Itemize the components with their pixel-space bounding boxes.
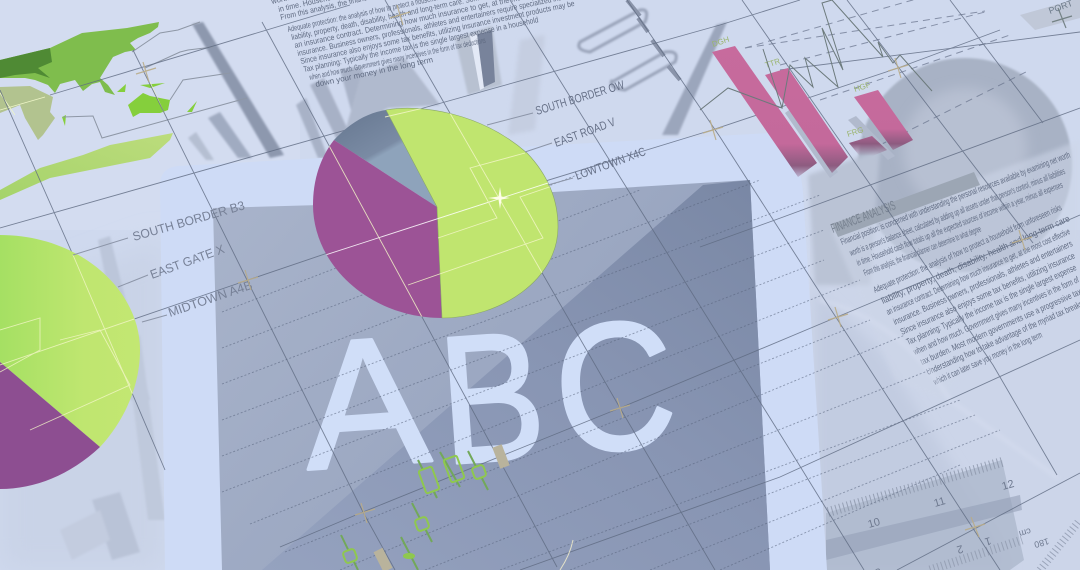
letters ABC: B	[433, 292, 551, 503]
finance text block, right: FINANCE ANALYSIS	[829, 197, 898, 236]
location labels, left: EAST GATE X	[148, 242, 227, 282]
world map	[0, 22, 247, 200]
location labels, left: SOUTH BORDER B3	[131, 198, 246, 244]
ruler and protractor	[820, 300, 1080, 570]
pink bar chart: HGF	[853, 80, 872, 94]
letters ABC: C	[546, 280, 683, 493]
ruler and protractor: 11	[933, 495, 947, 510]
finance text block, top centre	[270, 0, 589, 89]
pie chart, left	[0, 235, 140, 489]
location labels, centre: LOWTOWN X4C	[573, 144, 648, 183]
ruler and protractor: 2	[955, 542, 964, 555]
tablet frame	[160, 133, 827, 570]
location labels, centre: SOUTH BORDER OW	[534, 77, 626, 118]
finance text block, top centre: down your money in the long term	[315, 55, 434, 89]
finance text block, right	[829, 150, 1080, 387]
globe	[808, 0, 1080, 400]
pink bar chart	[700, 0, 932, 178]
pink bar chart: DGH	[711, 35, 731, 49]
ruler and protractor: 1	[983, 534, 992, 547]
dashed and dotted projection lines	[222, 170, 1000, 570]
location labels, centre: EAST ROAD V	[552, 115, 617, 150]
ruler and protractor: 180	[1033, 536, 1050, 550]
candlestick chart	[341, 446, 573, 570]
ruler and protractor: 10	[867, 516, 882, 531]
pencils and pens	[60, 22, 727, 560]
sparkle on pie	[488, 187, 510, 209]
finance text block, top centre: when and how much. Government gives many incentives in the form of tax deductions	[308, 36, 486, 82]
pie chart, top	[313, 108, 558, 318]
letters ABC	[296, 280, 683, 508]
location labels, left	[73, 198, 254, 322]
pink bar chart: FRG	[846, 125, 865, 139]
ruler and protractor: cm	[1018, 526, 1032, 539]
ruler and protractor: 12	[1001, 478, 1016, 493]
finance text block, top centre: Tax planning: Typically the income tax is the single largest expense in a household	[303, 15, 539, 74]
location labels, left: MIDTOWN A4B	[166, 278, 254, 320]
letters ABC: A	[296, 296, 436, 508]
pink bar chart: TTR	[764, 56, 782, 70]
tablet screen	[213, 180, 770, 570]
location labels, centre	[487, 77, 648, 185]
sharpener and paper clips	[455, 0, 680, 135]
